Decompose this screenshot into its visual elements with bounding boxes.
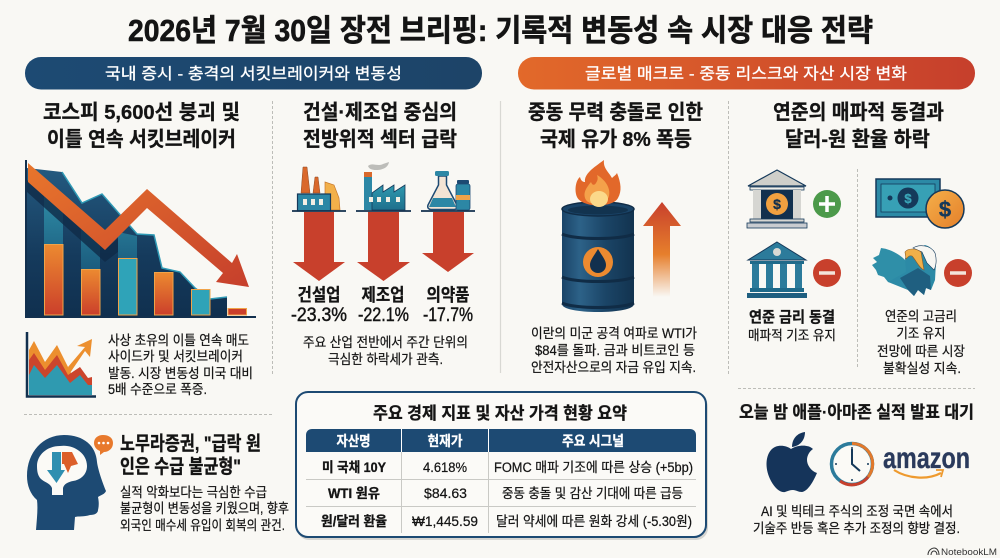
heading: table title: 주요 경제 지표 및 자산 가격 현황 요약 <box>373 404 627 423</box>
text: circuit breaker note: 5배 수준으로 폭증. <box>108 382 207 397</box>
table row: FX: 원/달러 환율 <box>321 514 387 529</box>
table row: treasury <box>322 460 693 475</box>
icon: apple <box>766 432 817 492</box>
table row: FX <box>321 514 692 529</box>
panel: Nomura view <box>27 433 289 533</box>
sector: construction: 건설업 <box>298 285 340 305</box>
text: Nomura body <box>120 485 289 533</box>
text: Fed outlook: 기조 유지 <box>896 326 946 341</box>
text: circuit breaker note: 사상 초유의 이틀 연속 매도 <box>108 333 249 348</box>
heading: oil surge <box>528 101 703 151</box>
section banner: global macro: 글로벌 매크로 - 중동 리스크와 자산 시장 변화 <box>585 65 907 83</box>
icon: banknote and coin: $ <box>939 197 951 222</box>
text: circuit breaker note: 사이드카 및 서킷브레이커 <box>108 349 243 364</box>
text: earnings note: AI 및 빅테크 주식의 조정 국면 속에서 <box>761 504 953 519</box>
table header: 자산명 <box>336 433 370 449</box>
heading: oil surge: 국제 유가 8% 폭등 <box>540 128 692 151</box>
sector: manufacturing: -22.1% <box>358 305 409 326</box>
icon: burning oil barrel <box>562 160 634 312</box>
text: sector note: 주요 산업 전반에서 주간 단위의 <box>303 335 468 350</box>
sector: manufacturing <box>356 162 411 326</box>
text: Fed hold: 연준 금리 동결 <box>749 309 835 326</box>
text: Nomura body: 실적 악화보다는 극심한 수급 <box>120 485 267 500</box>
chart: falling bars with zigzag arrow <box>26 160 256 317</box>
sector: manufacturing: 제조업 <box>362 285 404 305</box>
text: Nomura body: 불균형이 변동성을 키웠으며, 향후 <box>120 501 289 516</box>
table row: WTI: $84.63 <box>424 486 467 501</box>
table row: FX: 달러 약세에 따른 원화 강세 (-5.30원) <box>496 514 692 529</box>
heading: sectors: 전방위적 섹터 급락 <box>303 128 457 151</box>
panel: sector plunge <box>291 101 475 367</box>
table row: WTI: WTI 원유 <box>328 486 380 501</box>
heading: KOSPI crash <box>43 101 240 151</box>
heading: Nomura <box>120 433 261 478</box>
table header: 주요 시그널 <box>562 433 624 449</box>
text: circuit breaker note <box>108 333 253 397</box>
icon: bank with dollar and plus <box>747 170 841 228</box>
icon: banknote and coin <box>876 179 964 228</box>
section banner: global macro <box>518 57 975 90</box>
table row: WTI: 중동 충돌 및 감산 기대에 따른 급등 <box>502 486 683 501</box>
heading: earnings: 오늘 밤 애플·아마존 실적 발표 대기 <box>739 403 974 422</box>
text: oil note: 이란의 미군 공격 여파로 WTI가 <box>531 326 697 341</box>
section banner: domestic <box>25 57 482 90</box>
table header <box>306 429 696 452</box>
table header: 현재가 <box>428 433 463 449</box>
heading: Nomura: 노무라증권, "급락 원 <box>120 433 261 455</box>
icon: banknote and coin: $ <box>904 191 912 206</box>
panel: KOSPI <box>26 101 256 397</box>
heading: KOSPI crash: 코스피 5,600선 붕괴 및 <box>43 101 240 124</box>
sector: pharma: 의약품 <box>426 285 470 305</box>
sector: pharma: -17.7% <box>423 305 473 326</box>
heading: sectors: 건설·제조업 중심의 <box>303 101 457 124</box>
icon: eagle and minus <box>872 245 972 296</box>
sector: pharma <box>421 171 475 326</box>
title: 2026년 7월 30일 장전 브리핑: 기록적 변동성 속 시장 대응 전략 <box>128 14 873 48</box>
table row: treasury: 미 국채 10Y <box>322 460 386 475</box>
text: earnings note: 기술주 반등 혹은 추가 조정의 향방 결정. <box>753 521 960 536</box>
icon: mini volatility chart <box>27 332 96 396</box>
heading: KOSPI crash: 이틀 연속 서킷브레이커 <box>47 128 236 151</box>
arrow: oil price up <box>643 202 681 297</box>
logo: amazon: amazon <box>883 442 970 475</box>
section banner: domestic: 국내 증시 - 충격의 서킷브레이커와 변동성 <box>105 65 402 83</box>
icon: head with thumbs down <box>27 435 113 530</box>
table row: treasury: 4.618% <box>423 460 467 475</box>
icon: clock <box>832 443 873 485</box>
heading: Nomura: 인은 수급 불균형" <box>120 456 241 478</box>
heading: Fed: 연준의 매파적 동결과 <box>773 101 944 124</box>
text: oil note: 안전자산으로의 자금 유입 지속. <box>531 360 696 375</box>
text: oil note: $84를 돌파. 금과 비트코인 등 <box>535 343 695 358</box>
sector: construction: -23.3% <box>291 305 347 326</box>
text: Fed outlook: 불확실성 지속. <box>883 361 961 376</box>
table row: FX: ₩1,445.59 <box>412 514 478 529</box>
text: Fed outlook: 연준의 고금리 <box>885 309 957 324</box>
text: sector note: 극심한 하락세가 관측. <box>328 352 443 367</box>
heading: sectors <box>303 101 457 151</box>
panel: key indicators table <box>296 392 708 540</box>
icon: bank with minus <box>747 242 841 298</box>
table row: treasury: FOMC 매파 기조에 따른 상승 (+5bp) <box>494 460 693 475</box>
text: Fed outlook <box>877 309 965 376</box>
panel: Fed and FX <box>747 101 972 376</box>
text: sector note <box>303 335 468 367</box>
text: oil note <box>531 326 697 375</box>
text: earnings note <box>753 504 960 536</box>
text: Fed outlook: 전망에 따른 시장 <box>877 344 965 359</box>
text: Fed hold: 매파적 기조 유지 <box>748 328 836 343</box>
watermark: NotebookLM: NotebookLM <box>941 547 997 558</box>
panel: oil <box>528 101 703 375</box>
text: Fed hold <box>748 309 836 343</box>
heading: Fed: 달러-원 환율 하락 <box>785 128 930 151</box>
icon: bank with dollar and plus: $ <box>773 196 781 212</box>
heading: Fed <box>773 101 944 151</box>
panel: earnings <box>739 403 974 536</box>
text: Nomura body: 외국인 매수세 유입이 회복의 관건. <box>120 518 285 533</box>
heading: oil surge: 중동 무력 충돌로 인한 <box>528 101 703 124</box>
table row: WTI <box>328 486 683 501</box>
sector: construction <box>291 167 347 326</box>
text: circuit breaker note: 발동. 시장 변동성 미국 대비 <box>108 366 253 381</box>
